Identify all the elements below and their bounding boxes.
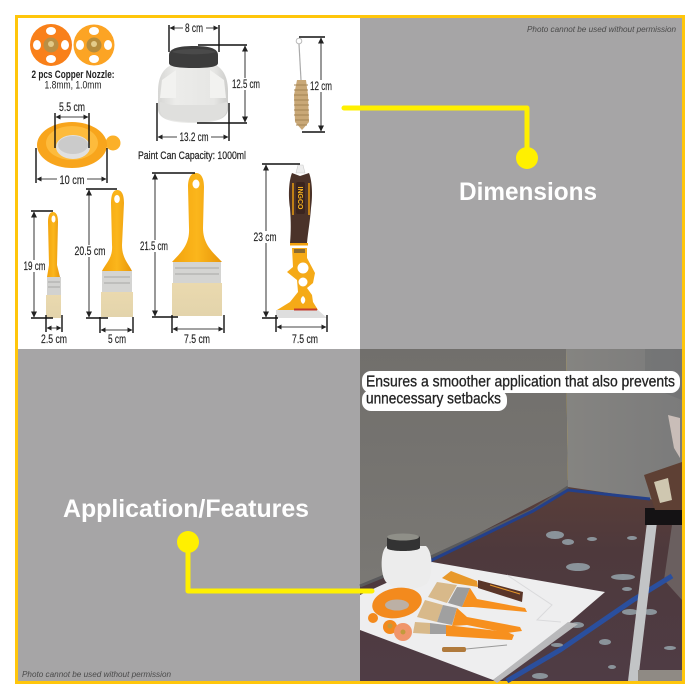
icon: medium paint brush (101, 190, 133, 317)
icon: cleaning brush (294, 38, 309, 130)
dimension: scraper width 7.5 cm (276, 315, 327, 346)
heading: application/features: Application/Features (63, 495, 309, 523)
dimension: medium brush width 5 cm: 5 cm (108, 334, 126, 346)
text: paint can capacity: Paint Can Capacity: 1000ml (138, 150, 246, 162)
dimension: small brush width 2.5 cm: 2.5 cm (41, 334, 67, 346)
photo: cleaning brush (442, 645, 507, 652)
dimension: can width 8 cm (169, 23, 219, 52)
dimension: ring outer 10 cm: 10 cm (60, 175, 84, 187)
icon: strainer ring (37, 122, 120, 168)
floor tape (507, 576, 672, 681)
photo: brushes (413, 582, 527, 640)
dimension: scraper 23 cm: 23 cm (254, 232, 276, 244)
dimension: can diameter 13.2 cm (157, 103, 229, 144)
dimension: cleaning brush 12 cm: 12 cm (310, 81, 332, 93)
dimension: medium brush 20.5 cm (74, 189, 117, 318)
dimension: small brush 19 cm: 19 cm (24, 261, 46, 273)
stand base (645, 508, 682, 525)
photo: nozzles (383, 620, 412, 641)
panel: dimensions diagram (18, 18, 360, 349)
dimension: can diameter 13.2 cm: 13.2 cm (180, 132, 208, 144)
text: nozzle label: 1.8mm, 1.0mm (44, 80, 102, 92)
icon: large paint brush (172, 173, 222, 316)
dimension: ring inner 5.5 cm: 5.5 cm (59, 102, 85, 114)
floor (360, 480, 682, 681)
dimension: ring outer 10 cm (36, 148, 107, 187)
dimension: small brush width 2.5 cm (41, 315, 67, 346)
dimension: large brush width 7.5 cm (172, 315, 224, 346)
note: photo permission top: Photo cannot be used without permission (527, 25, 677, 34)
dimension: can height 12.5 cm (197, 45, 261, 123)
dimension: cleaning brush 12 cm (299, 37, 333, 132)
wall tape (430, 490, 650, 561)
dimension: large brush 21.5 cm: 21.5 cm (140, 241, 168, 253)
left wall (360, 349, 568, 586)
callout: smoother application: Ensures a smoother application that also prevents (366, 374, 675, 390)
icon: paint can (158, 46, 228, 123)
dimension: can width 8 cm: 8 cm (185, 23, 203, 35)
callout: smoother application: unnecessary setbacks (366, 390, 501, 408)
text: nozzle label (32, 69, 114, 92)
photo: paint can (382, 534, 432, 589)
note: photo permission bottom: Photo cannot be used without permission (22, 670, 172, 679)
icon: multi-tool scraper (276, 165, 327, 318)
stand foot (638, 670, 682, 681)
stand pole (628, 522, 657, 681)
callout: smoother application (362, 371, 680, 411)
dimension: large brush width 7.5 cm: 7.5 cm (184, 334, 210, 346)
far floor strip (664, 525, 682, 600)
arrow: dimensions connector (344, 108, 538, 169)
dimension: small brush 19 cm (23, 211, 53, 318)
panel: room photo (360, 349, 682, 683)
icon: multi-tool scraper: INGCO (296, 187, 303, 210)
white sheet (360, 562, 605, 680)
photo: scraper (442, 571, 523, 602)
text: nozzle label: 2 pcs Copper Nozzle: (32, 69, 114, 81)
panel: dimensions background (360, 18, 682, 349)
dimension: medium brush width 5 cm (100, 317, 133, 346)
icon: copper nozzles (30, 24, 114, 66)
dimension: can height 12.5 cm: 12.5 cm (232, 79, 260, 91)
panel: application background (18, 349, 360, 681)
icon: small paint brush (46, 212, 61, 318)
paint splatters (532, 531, 676, 679)
dimension: scraper 23 cm (253, 164, 300, 318)
arrow: application connector (177, 531, 372, 591)
dimension: scraper width 7.5 cm: 7.5 cm (292, 334, 318, 346)
photo: ring (368, 584, 424, 623)
dimension: medium brush 20.5 cm: 20.5 cm (74, 246, 106, 258)
heading: dimensions: Dimensions (459, 178, 597, 206)
dimension: ring inner 5.5 cm (55, 102, 89, 148)
right wall (566, 349, 682, 510)
baseboard (360, 487, 568, 586)
paint bag (644, 462, 682, 510)
dimension: large brush 21.5 cm (139, 173, 195, 317)
